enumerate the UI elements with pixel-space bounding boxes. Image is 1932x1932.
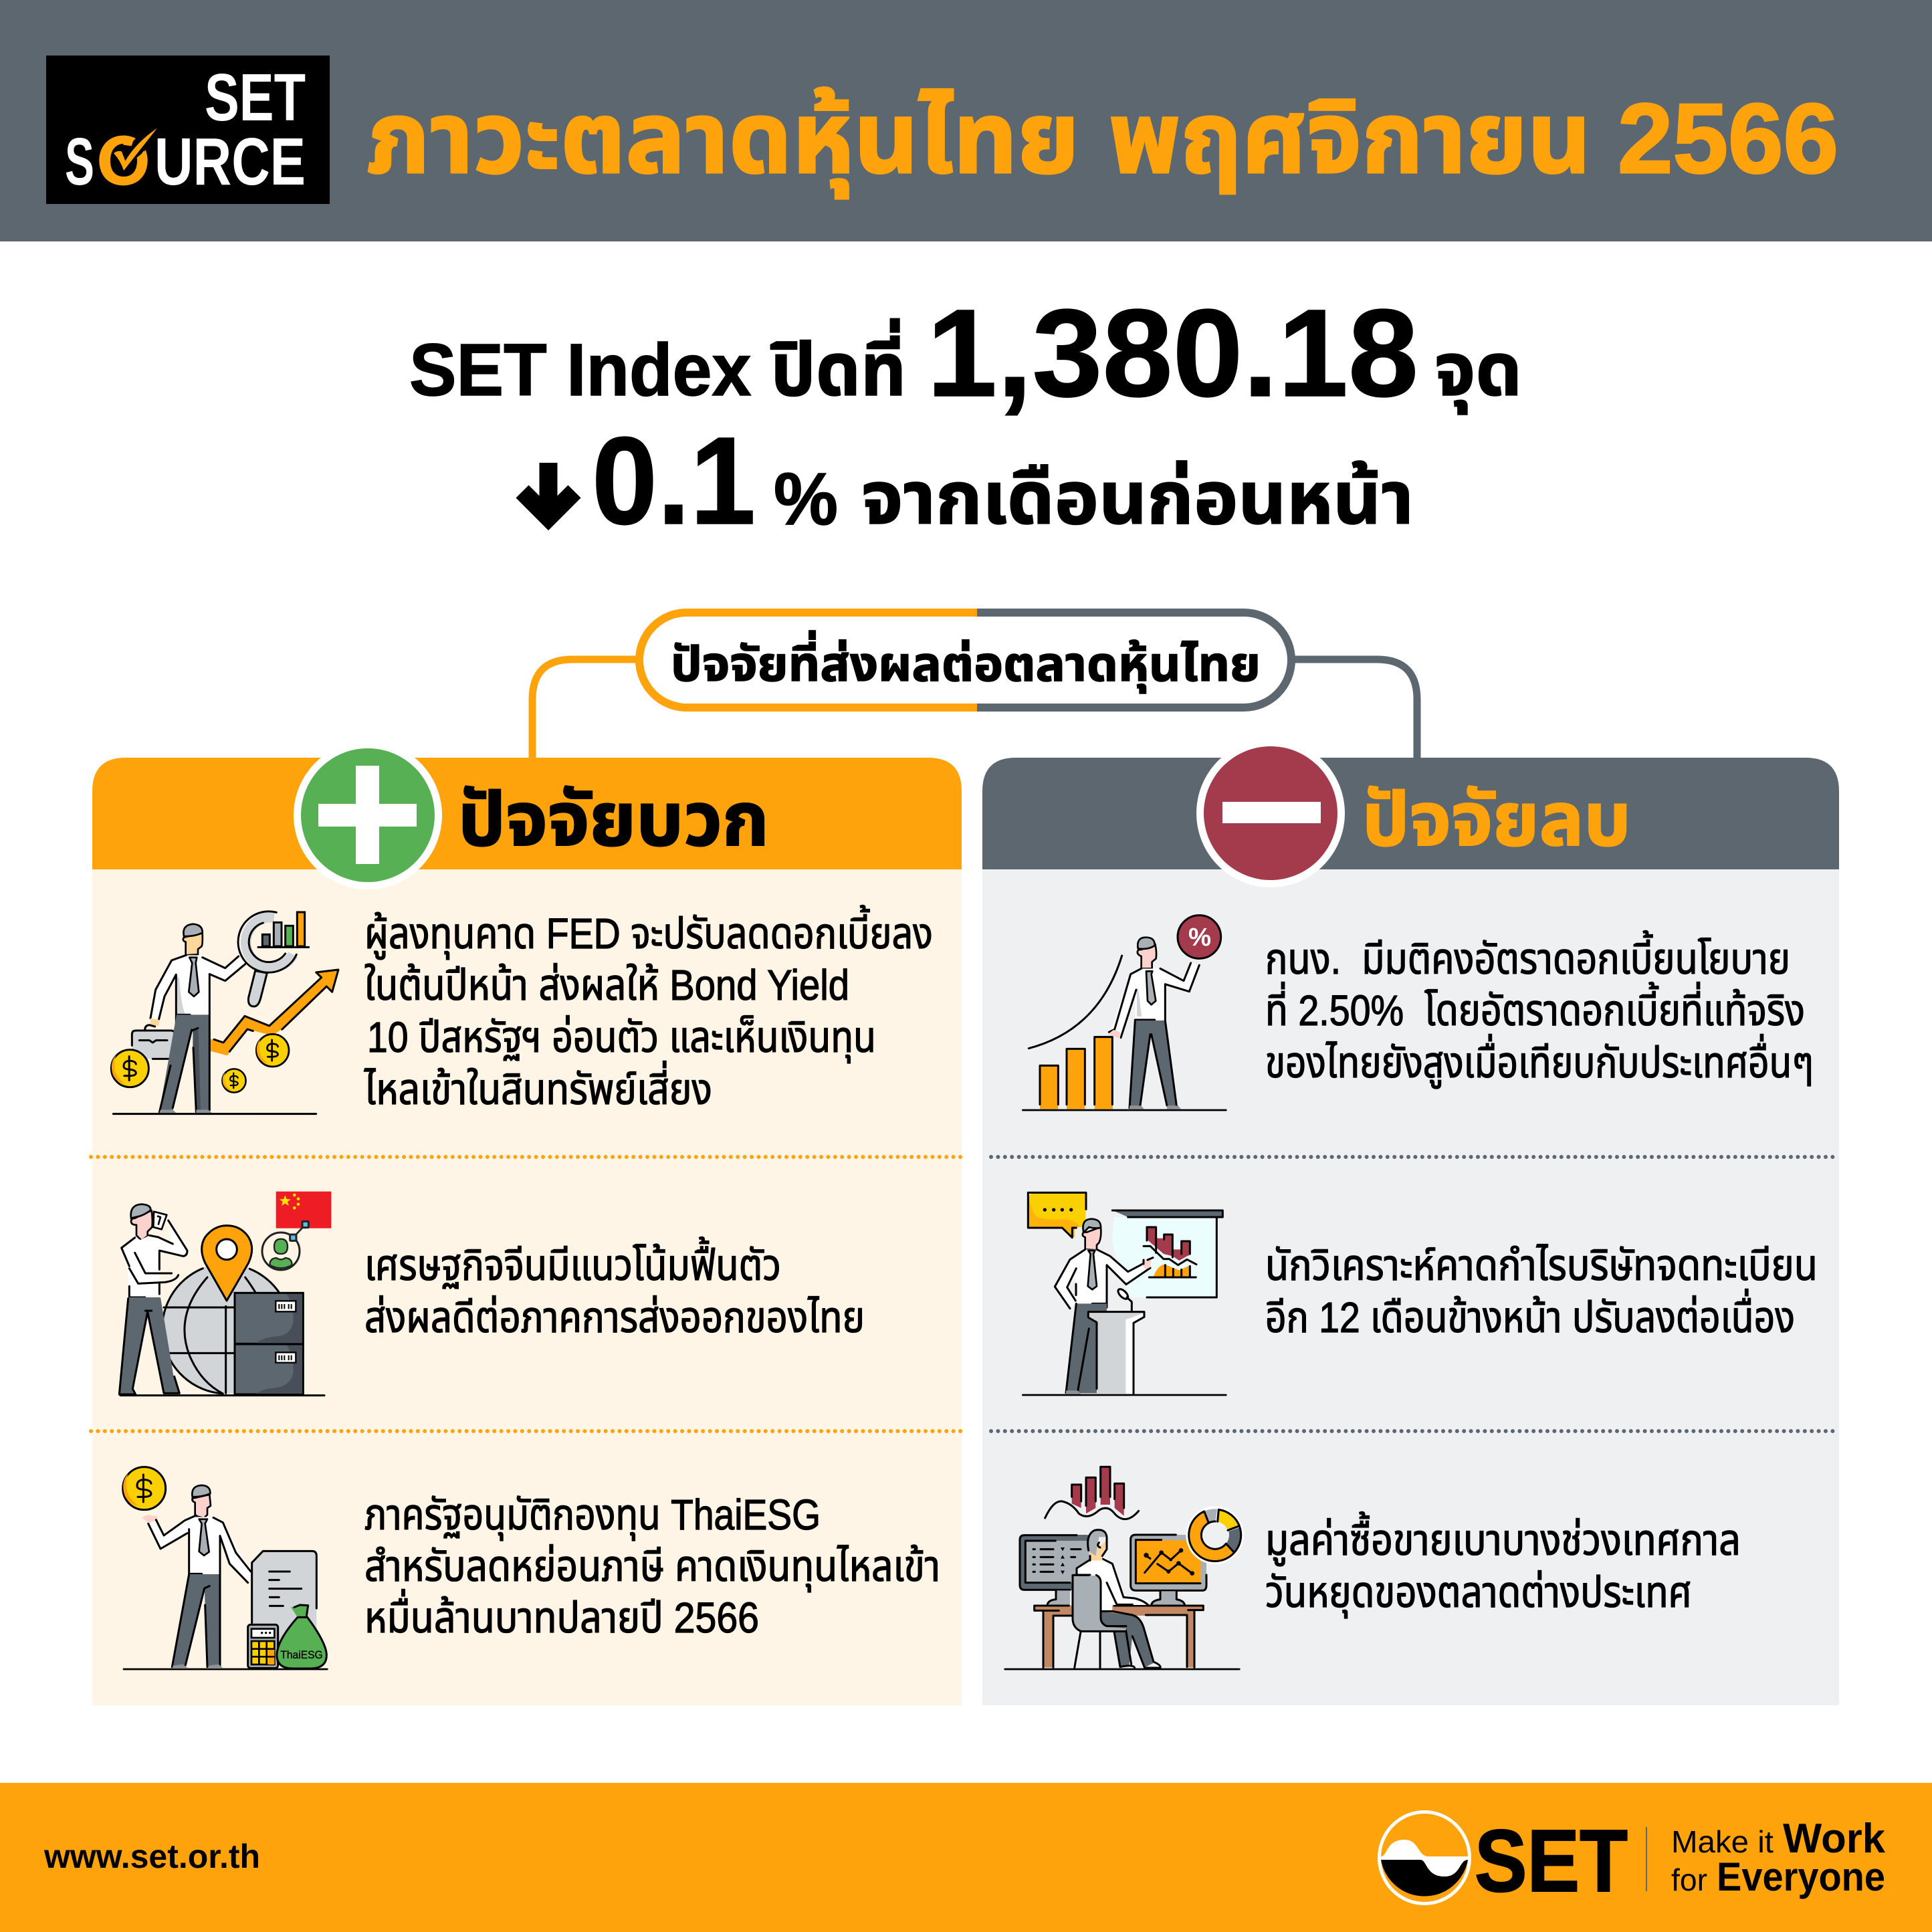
coin (222, 1069, 246, 1093)
illustration: trader at two monitors with donut chart (1005, 1467, 1244, 1669)
illustration: man on phone, globe, China flag and boxes (119, 1192, 331, 1396)
title: ภาวะตลาดหุ้นไทย (366, 82, 1079, 199)
title: พฤศจิกายน (1109, 82, 1591, 194)
coin (111, 1050, 148, 1087)
text: thin trading over holidays: มูลค่าซื้อขายเบาบางช่วงเทศกาล (1265, 1511, 1741, 1566)
text: China economy recovery: ส่งผลดีต่อภาคการส่งออกของไทย (364, 1293, 865, 1341)
connectors (532, 659, 1417, 759)
slogan: for (1671, 1862, 1707, 1897)
change from previous month: 0.1 (592, 412, 756, 550)
logo: SET SOURCE: SET (205, 60, 306, 135)
title (366, 82, 1838, 199)
text: analysts cut earnings forecast (1265, 1241, 1818, 1341)
illustration: investor with magnifier and rising arrow (111, 911, 338, 1114)
text: thin trading over holidays (1265, 1511, 1741, 1618)
change from previous month: จากเดือนก่อนหน้า (861, 457, 1414, 540)
footer band (0, 1783, 1932, 1932)
text: analysts cut earnings forecast: นักวิเคราะห์คาดกำไรบริษัทจดทะเบียน (1265, 1241, 1818, 1289)
heading: negative factors: ปัจจัยลบ (1362, 778, 1631, 861)
text: investor FED expectation: 10 ปีสหรัฐฯ อ่อนตัว และเห็นเงินทุน (367, 1013, 876, 1063)
text: MPC holds policy rate: กนง. มีมติคงอัตราดอกเบี้ยนโยบาย (1265, 930, 1790, 983)
text: China economy recovery (364, 1237, 865, 1341)
text: investor FED expectation: ไหลเข้าในสินทรัพย์เสี่ยง (364, 1061, 712, 1113)
text: ThaiESG fund approval: สำหรับลดหย่อนภาษี คาดเงินทุนไหลเข้า (364, 1542, 940, 1592)
SET Index headline: SET Index ปิดที่ (409, 318, 906, 411)
slogan: Make it (1671, 1824, 1774, 1859)
illustration: analyst presenting falling chart at podium (1023, 1192, 1226, 1395)
text: MPC holds policy rate: ที่ 2.50% โดยอัตราดอกเบี้ยที่แท้จริง (1265, 982, 1805, 1035)
panel: negative factors (982, 758, 1839, 1705)
SET Index headline (409, 284, 1522, 423)
illustration: man holding percent badge beside bars (1023, 916, 1226, 1110)
slogan (1671, 1816, 1886, 1899)
text: ThaiESG fund approval: ภาครัฐอนุมัติกองทุน ThaiESG (364, 1491, 821, 1541)
text: ThaiESG fund approval: หมื่นล้านบาทปลายปี 2566 (364, 1589, 759, 1642)
text: analysts cut earnings forecast: อีก 12 เดือนข้างหน้า ปรับลงต่อเนื่อง (1265, 1289, 1795, 1341)
icon: minus (1196, 739, 1345, 887)
SET Index headline: จุด (1434, 329, 1522, 415)
slogan: Everyone (1717, 1854, 1885, 1899)
text: ThaiESG fund approval (364, 1491, 940, 1642)
text: investor FED expectation: ในต้นปีหน้า ส่งผลให้ Bond Yield (364, 961, 849, 1009)
change from previous month (522, 412, 1414, 550)
text: investor FED expectation: ผู้ลงทุนคาด FED จะปรับลดดอกเบี้ยลง (364, 905, 933, 960)
icon: down arrow (522, 463, 574, 518)
logo: SET (1379, 1812, 1628, 1910)
icon: plus (294, 741, 442, 889)
SET Index headline: 1,380.18 (927, 284, 1418, 423)
text: investor FED expectation (364, 905, 933, 1113)
title: 2566 (1618, 84, 1838, 194)
text: China economy recovery: เศรษฐกิจจีนมีแนวโน้มฟื้นตัว (364, 1237, 781, 1289)
factor heading pill (639, 613, 1291, 708)
logo: SET: SET (1475, 1812, 1628, 1910)
text: MPC holds policy rate (1265, 930, 1814, 1089)
website: www.set.or.th (43, 1838, 260, 1875)
logo: SET SOURCE: URCE (154, 124, 306, 199)
illustration: man with coin, document, calculator and ThaiESG bag: ThaiESG (280, 1648, 323, 1661)
slogan: Work (1783, 1816, 1886, 1862)
factor heading pill: ปัจจัยที่ส่งผลต่อตลาดหุ้นไทย (671, 631, 1261, 693)
illustration: man with coin, document, calculator and ThaiESG bag (123, 1467, 327, 1669)
illustration: man holding percent badge beside bars: % (1188, 923, 1211, 952)
logo: SET SOURCE: S (65, 124, 94, 199)
panel: positive factors (92, 758, 962, 1705)
header band (0, 0, 1932, 241)
text: thin trading over holidays: วันหยุดของตลาดต่างประเทศ (1265, 1568, 1692, 1618)
text: MPC holds policy rate: ของไทยยังสูงเมื่อเทียบกับประเทศอื่นๆ (1265, 1034, 1814, 1089)
heading: positive factors: ปัจจัยบวก (458, 778, 769, 861)
coin (256, 1034, 289, 1067)
logo: SET SOURCE (46, 56, 330, 204)
change from previous month: % (774, 458, 838, 540)
